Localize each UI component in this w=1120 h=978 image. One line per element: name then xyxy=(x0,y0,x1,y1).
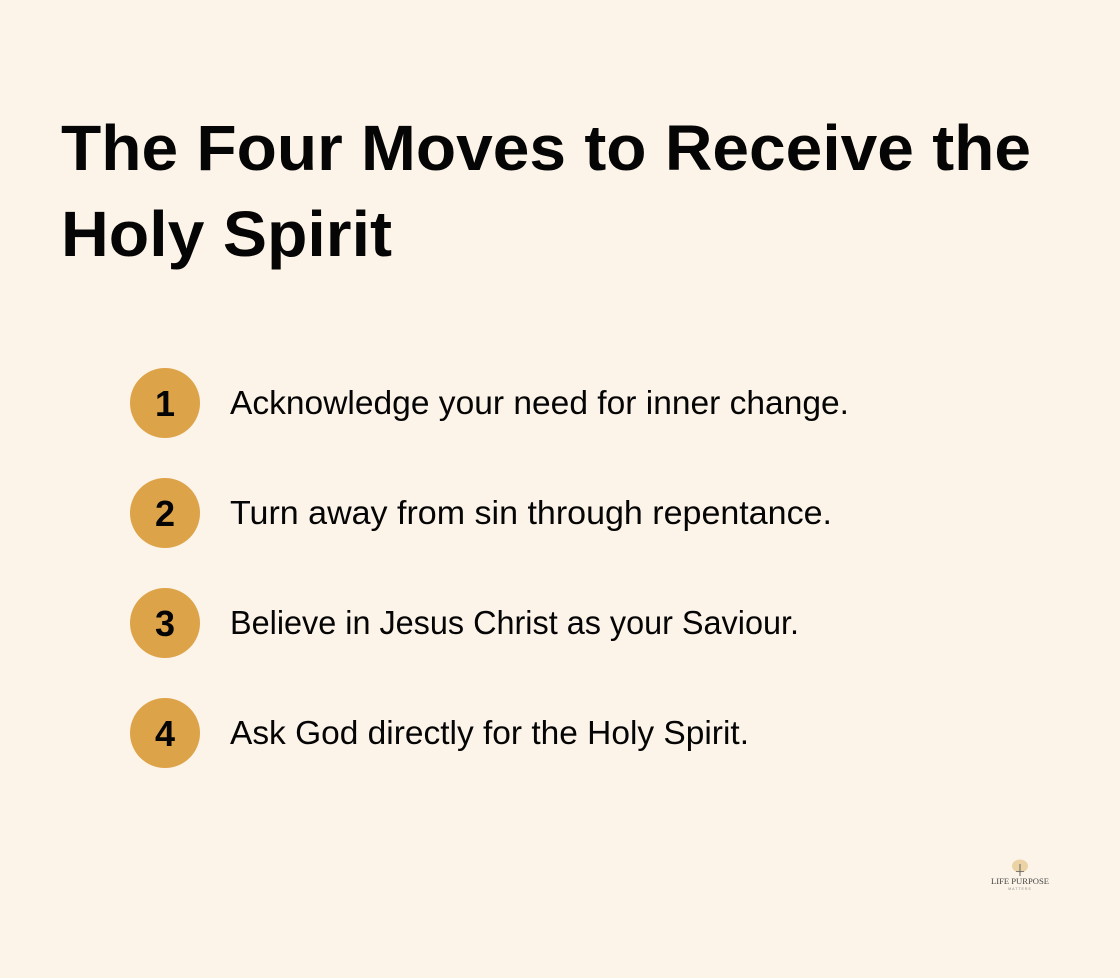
title: Holy Spirit xyxy=(61,198,392,270)
title xyxy=(61,112,1031,270)
badge 3: 3 xyxy=(155,603,175,644)
badge 4: 4 xyxy=(155,713,175,754)
badge 2 xyxy=(130,478,200,548)
step 4 xyxy=(130,698,749,768)
badge 2: 2 xyxy=(155,493,175,534)
badge 1: 1 xyxy=(155,383,175,424)
step 3 xyxy=(130,588,799,658)
badge 1 xyxy=(130,368,200,438)
title: The Four Moves to Receive the xyxy=(61,112,1031,184)
badge 3 xyxy=(130,588,200,658)
logo tagline: MATTERS xyxy=(1008,887,1032,891)
badge 4 xyxy=(130,698,200,768)
logo wordmark: LIFE PURPOSE xyxy=(991,876,1049,886)
step 1 text: Acknowledge your need for inner change. xyxy=(230,384,849,421)
step 2 xyxy=(130,478,832,548)
step 1 xyxy=(130,368,849,438)
icon: tree xyxy=(1012,860,1028,876)
step 4 text: Ask God directly for the Holy Spirit. xyxy=(230,714,749,751)
step 3 text: Believe in Jesus Christ as your Saviour. xyxy=(230,604,799,641)
step 2 text: Turn away from sin through repentance. xyxy=(230,494,832,531)
logo: Life Purpose Matters xyxy=(991,860,1049,891)
